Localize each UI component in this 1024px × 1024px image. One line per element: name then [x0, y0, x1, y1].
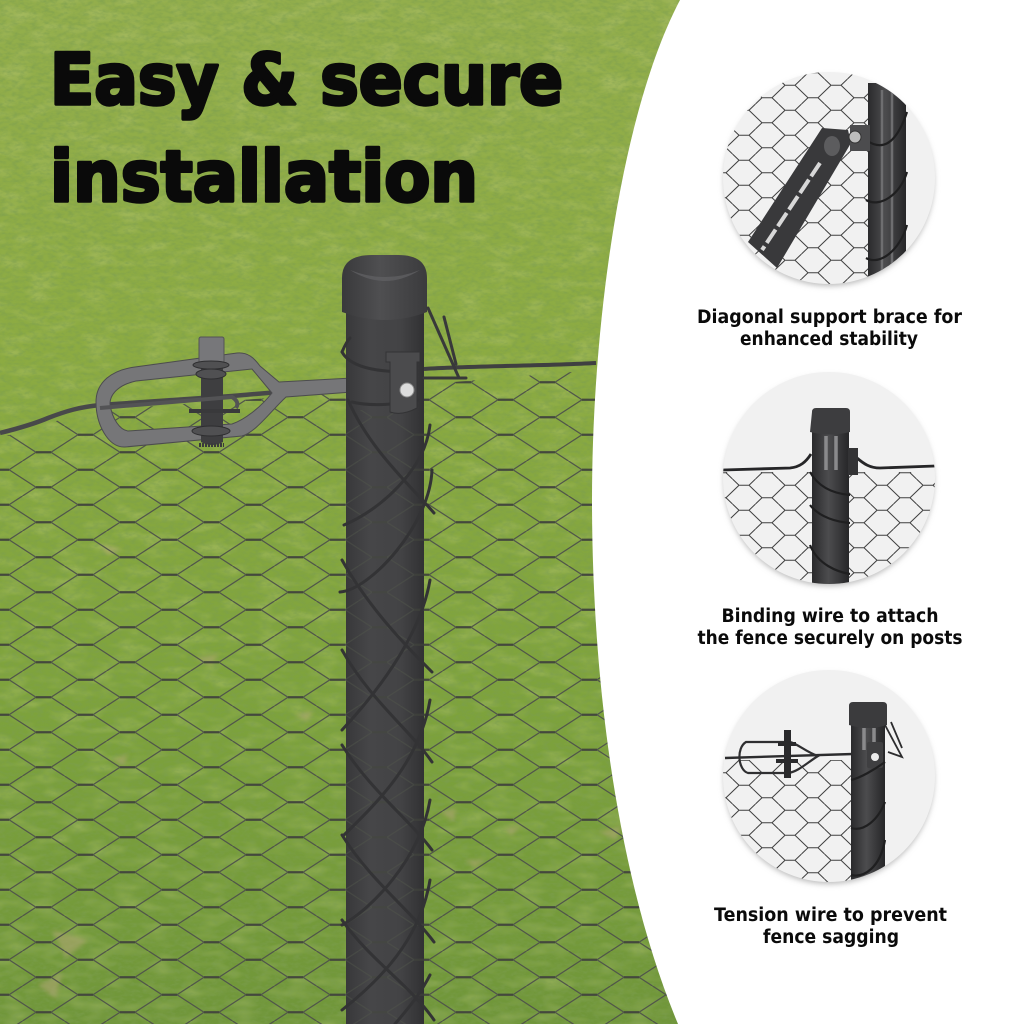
caption: tension wire [714, 905, 947, 948]
right top wire [424, 363, 596, 369]
panel: diagonal brace [720, 70, 935, 290]
title [50, 39, 563, 218]
grass background [0, 0, 700, 1024]
bracket bolt [400, 383, 414, 397]
circle shadow [724, 376, 934, 586]
tensioner [96, 337, 352, 447]
caption: diagonal brace: enhanced stability [740, 329, 918, 350]
circle background [723, 72, 935, 284]
tensioner bolt head [199, 337, 224, 363]
wire tie loops [424, 308, 466, 378]
caption: diagonal brace: Diagonal support brace for [697, 307, 963, 328]
tensioner nuts [189, 361, 240, 445]
caption: binding wire: Binding wire to attach [722, 606, 938, 627]
tension wire [0, 386, 350, 433]
fence post [342, 255, 427, 1024]
circle background [723, 372, 935, 584]
caption: binding wire: the fence securely on posts [698, 628, 962, 649]
mesh over post [346, 410, 424, 1024]
title: Easy & secure [50, 39, 563, 121]
post body [346, 312, 424, 1024]
panel: tension wire [720, 670, 935, 895]
title: installation [50, 136, 478, 218]
detail illustration: tensioner on post [720, 702, 902, 895]
inner wire through tensioner [100, 397, 237, 408]
circle shadow [724, 674, 934, 884]
caption: diagonal brace [697, 307, 963, 350]
cap highlight [350, 270, 420, 281]
circle shadow [724, 76, 934, 286]
detail illustration: post with binding wire [720, 408, 940, 592]
tensioner frame [96, 353, 352, 447]
white curved panel [592, 0, 1024, 1024]
bracket plate [386, 352, 420, 413]
tensioner bolt [201, 360, 223, 445]
panel: binding wire [720, 372, 940, 592]
binding wire spiral on post [340, 338, 434, 1024]
circle background [723, 670, 935, 882]
caption: binding wire [698, 606, 962, 649]
post cap [342, 255, 427, 320]
caption: tension wire: fence sagging [763, 927, 899, 948]
caption: tension wire: Tension wire to prevent [714, 905, 947, 926]
detail illustration: brace [720, 70, 907, 290]
mounting bracket [386, 352, 420, 413]
chicken wire mesh on grass [0, 360, 700, 1024]
